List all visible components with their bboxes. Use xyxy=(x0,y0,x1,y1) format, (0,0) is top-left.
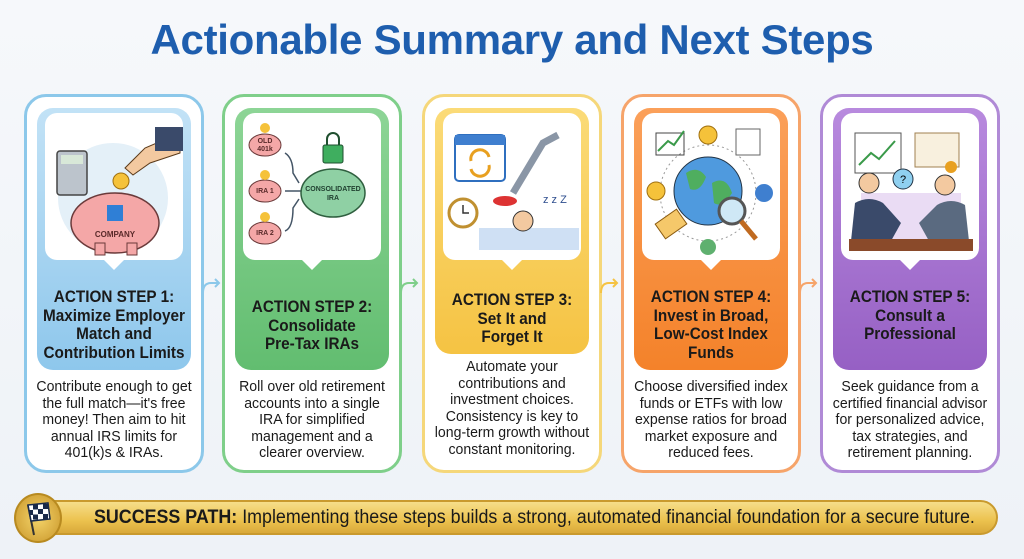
title: Actionable Summary and Next Steps xyxy=(151,16,873,63)
icon: globe with index funds xyxy=(642,113,780,260)
description: step 1: Contribute enough to get xyxy=(36,378,192,395)
heading: step 3: Set It and xyxy=(478,308,546,328)
description: step 3: Automate your xyxy=(466,358,558,375)
heading: step 4: Low-Cost Index xyxy=(654,324,768,343)
panel: step 1 xyxy=(24,94,204,473)
card: step 5 header xyxy=(833,108,987,370)
card: step 3 header xyxy=(435,108,589,354)
heading: step 4 xyxy=(651,287,771,362)
description: step 3 xyxy=(435,358,590,458)
icon: checkered flag medallion xyxy=(14,493,62,543)
description: step 3: investment choices. xyxy=(450,391,574,408)
arrow 4 xyxy=(801,278,818,292)
card: step 1 header xyxy=(37,108,191,370)
heading: step 3: ACTION STEP 3: xyxy=(452,290,572,309)
icon: advisor handshake xyxy=(841,113,979,260)
description: step 4 xyxy=(634,378,788,461)
arrow 2 xyxy=(402,278,418,292)
heading: step 5: Professional xyxy=(864,324,956,343)
icon: advisor handshake: ? xyxy=(900,174,906,186)
heading: step 4: Funds xyxy=(688,342,734,362)
heading: step 3: Forget It xyxy=(481,327,543,346)
banner bar xyxy=(36,500,998,535)
icon: consolidate piggy banks xyxy=(243,113,381,260)
icon: piggy bank with company match xyxy=(45,113,183,260)
heading: step 4: Invest in Broad, xyxy=(654,306,768,324)
description: step 4: market exposure and xyxy=(645,428,777,444)
heading: step 1: Match and xyxy=(76,324,152,343)
description: step 2: Roll over old retirement xyxy=(239,378,385,395)
arrow 3 xyxy=(600,278,618,293)
description: step 5: Seek guidance from a xyxy=(841,378,979,395)
panel: step 2 xyxy=(222,94,402,473)
heading: step 1: ACTION STEP 1: xyxy=(54,287,174,306)
description: step 1: the full match—it's free xyxy=(43,394,185,412)
description: step 4: reduced fees. xyxy=(668,444,754,461)
description: step 4: funds or ETFs with low xyxy=(640,394,782,412)
icon: consolidate piggy banks: 401k xyxy=(257,146,273,153)
description: step 1 xyxy=(36,378,192,461)
description: step 5: for personalized advice, xyxy=(836,411,984,428)
heading: step 2 xyxy=(252,297,372,353)
description: step 2: accounts into a single xyxy=(244,394,380,412)
panel: step 5 xyxy=(820,94,1000,473)
heading: step 5 xyxy=(850,287,970,343)
description: step 3: long-term growth without xyxy=(435,424,589,441)
text: success path: SUCCESS PATH: Implementing these steps builds a strong, automated financial foundation for a secure future. xyxy=(94,507,975,528)
arrow 1 xyxy=(204,278,220,292)
description: step 5: certified financial advisor xyxy=(833,394,987,412)
description: step 2: management and a xyxy=(251,428,373,444)
icon: consolidate piggy banks: IRA xyxy=(327,195,339,202)
heading: step 5: Consult a xyxy=(875,306,945,324)
icon: consolidate piggy banks: IRA 1 xyxy=(256,188,274,195)
heading: step 1: Maximize Employer xyxy=(43,306,185,324)
description: step 4: expense ratios for broad xyxy=(635,411,787,428)
description: step 2: IRA for simplified xyxy=(259,411,365,428)
heading: step 5: ACTION STEP 5: xyxy=(850,287,970,306)
icon: consolidate piggy banks: IRA 2 xyxy=(256,230,274,237)
card: step 4 header xyxy=(634,108,788,370)
heading: step 4: ACTION STEP 4: xyxy=(651,287,771,306)
description: step 5: tax strategies, and xyxy=(852,428,968,444)
description: step 5: retirement planning. xyxy=(848,444,972,461)
description: step 1: money! Then aim to hit xyxy=(42,411,186,428)
heading: step 1: Contribution Limits xyxy=(43,342,185,362)
heading: step 1 xyxy=(43,287,185,362)
description: step 5 xyxy=(833,378,987,461)
icon: automation and sleeping: z z Z xyxy=(543,194,567,206)
description: step 1: annual IRS limits for xyxy=(51,428,177,444)
description: step 2: clearer overview. xyxy=(259,444,365,461)
description: step 3: constant monitoring. xyxy=(449,440,575,458)
icon: consolidate piggy banks: CONSOLIDATED xyxy=(305,186,361,193)
banner: success path xyxy=(14,493,998,543)
panel: step 3 xyxy=(422,94,602,473)
heading: step 2: Consolidate xyxy=(268,316,356,334)
description: step 3: Consistency is key to xyxy=(446,408,578,424)
heading: step 2: Pre-Tax IRAs xyxy=(265,334,359,353)
description: step 3: contributions and xyxy=(458,374,566,392)
heading: step 2: ACTION STEP 2: xyxy=(252,297,372,316)
card: step 2 header xyxy=(235,108,389,370)
heading: step 3 xyxy=(452,290,572,346)
panel: step 4 xyxy=(621,94,801,473)
description: step 1: 401(k)s & IRAs. xyxy=(65,444,163,461)
icon: automation and sleeping xyxy=(443,113,581,260)
icon: piggy bank with company match: COMPANY xyxy=(95,230,136,239)
description: step 2 xyxy=(239,378,385,461)
description: step 4: Choose diversified index xyxy=(634,378,788,395)
icon: consolidate piggy banks: OLD xyxy=(258,138,272,145)
